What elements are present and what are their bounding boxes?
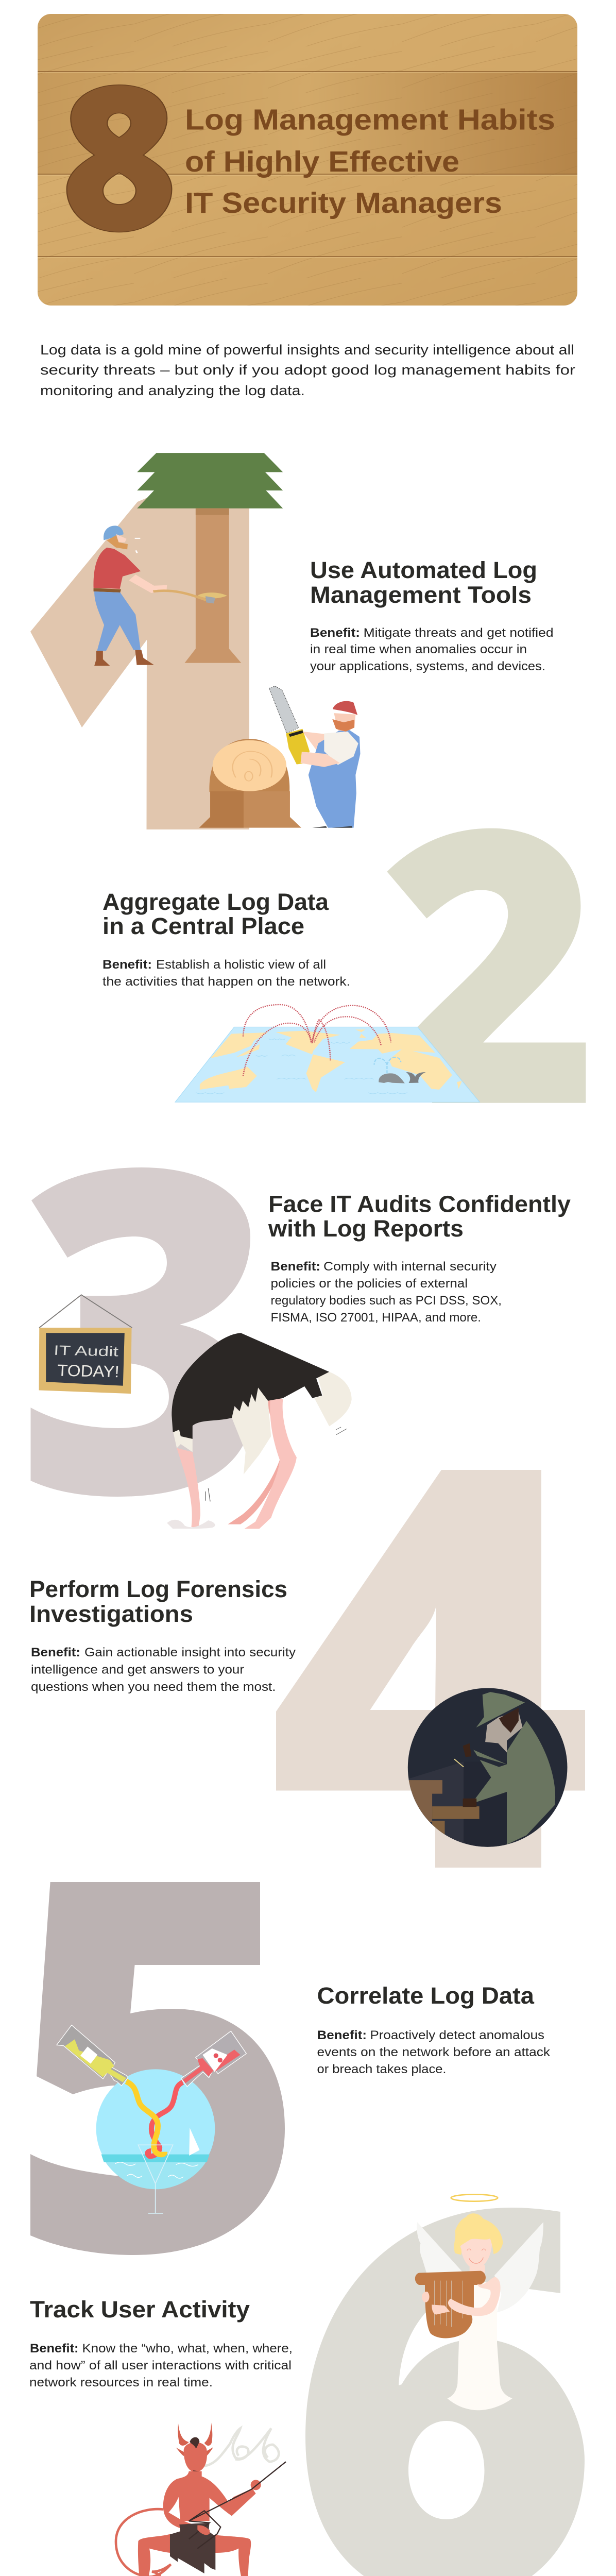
heading: with Log Reports — [268, 1215, 464, 1242]
benefit text: questions when you need them the most. — [31, 1680, 276, 1694]
benefit text: events on the network before an attack — [317, 2045, 551, 2059]
benefit text: Know the “who, what, when, where, — [82, 2342, 293, 2355]
benefit text — [271, 1260, 502, 1325]
heading: Track User Activity — [30, 2296, 250, 2323]
heading — [268, 1191, 571, 1242]
benefit text: intelligence and get answers to your — [31, 1663, 244, 1676]
benefit text: or breach takes place. — [317, 2062, 446, 2076]
intro text: security threats – but only if you adopt good log management habits for — [40, 362, 575, 378]
benefit text — [102, 958, 350, 989]
intro text: monitoring and analyzing the log data. — [40, 383, 305, 398]
number 1 — [30, 495, 249, 829]
number 5 — [30, 1882, 285, 2255]
benefit text: Benefit: — [317, 2028, 367, 2042]
heading: Use Automated Log — [310, 557, 537, 583]
title: Log Management Habits — [185, 103, 555, 136]
number 2 — [387, 828, 586, 1103]
number 4 — [276, 1470, 585, 1868]
benefit text: network resources in real time. — [29, 2376, 213, 2389]
benefit text: Mitigate threats and get notified — [364, 626, 554, 640]
illustration: detective — [408, 1688, 567, 1849]
heading: Investigations — [29, 1601, 193, 1627]
benefit text — [29, 2342, 293, 2389]
heading: Correlate Log Data — [317, 1982, 535, 2009]
benefit text: Comply with internal security — [323, 1260, 497, 1274]
panel: habit 3 — [31, 1167, 571, 1529]
panel: habit 2 — [102, 828, 586, 1103]
benefit text: FISMA, ISO 27001, HIPAA, and more. — [271, 1311, 481, 1325]
illustration: sign and ostrich — [39, 1295, 352, 1529]
heading: Face IT Audits Confidently — [268, 1191, 571, 1217]
title: IT Security Managers — [185, 187, 502, 219]
heading: Aggregate Log Data — [102, 889, 329, 915]
panel: habit 5 — [30, 1882, 551, 2255]
benefit text: and how” of all user interactions with critical — [29, 2359, 292, 2372]
title: of Highly Effective — [185, 145, 459, 178]
benefit text: your applications, systems, and devices. — [310, 659, 545, 673]
benefit text: Benefit: — [310, 626, 360, 640]
heading — [310, 557, 537, 608]
illustration: devil — [116, 2422, 286, 2576]
heading: Perform Log Forensics — [29, 1576, 287, 1602]
panel: habit 1 — [30, 453, 554, 829]
heading: in a Central Place — [102, 913, 304, 939]
heading — [29, 1576, 287, 1627]
benefit text: Benefit: — [271, 1260, 320, 1274]
header wood panel — [38, 14, 577, 306]
intro text — [40, 342, 575, 398]
panel: habit 6 — [29, 2194, 585, 2576]
panel: habit 4 — [29, 1470, 585, 1868]
benefit text: the activities that happen on the network. — [102, 975, 350, 989]
benefit text: Benefit: — [31, 1646, 80, 1659]
illustration: sign and ostrich: IT Audit — [53, 1343, 119, 1360]
benefit text: in real time when anomalies occur in — [310, 642, 527, 656]
number 3 — [31, 1167, 252, 1497]
benefit text: Gain actionable insight into security — [84, 1646, 296, 1659]
title — [185, 103, 555, 219]
illustration: tree and lumberjacks — [93, 453, 360, 828]
benefit text: Establish a holistic view of all — [156, 958, 326, 972]
illustration: world map — [175, 1005, 480, 1102]
illustration: angel — [415, 2194, 543, 2410]
benefit text: regulatory bodies such as PCI DSS, SOX, — [271, 1294, 502, 1308]
benefit text: Proactively detect anomalous — [370, 2028, 544, 2042]
benefit text — [310, 626, 554, 673]
intro text: Log data is a gold mine of powerful insights and security intelligence about all — [40, 342, 574, 358]
number 6 — [305, 2208, 585, 2576]
illustration: cocktail and bottles — [57, 2025, 246, 2213]
benefit text: Benefit: — [102, 958, 152, 972]
illustration: sign and ostrich: TODAY! — [57, 1361, 120, 1381]
benefit text — [31, 1646, 296, 1694]
benefit text: policies or the policies of external — [271, 1277, 468, 1291]
heading — [102, 889, 329, 939]
benefit text — [317, 2028, 551, 2076]
icon: carved number 8 — [67, 85, 172, 232]
benefit text: Benefit: — [30, 2342, 78, 2355]
heading: Management Tools — [310, 582, 532, 608]
